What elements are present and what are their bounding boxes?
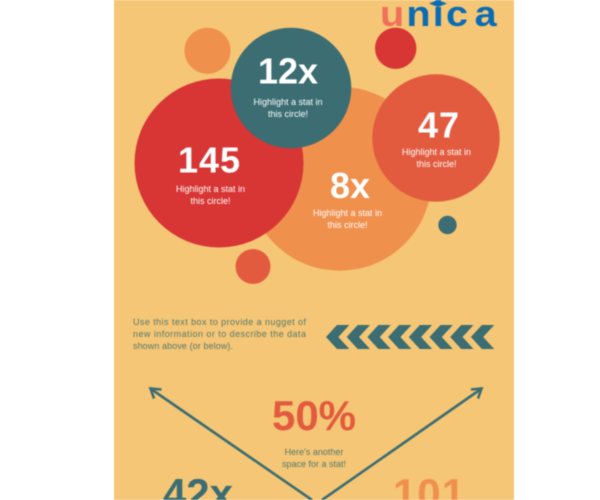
- stat circle: 12x: Highlight a stat in: [253, 97, 323, 107]
- stat circle: 8x: [248, 87, 432, 271]
- stat circle: 47: 47: [418, 104, 460, 146]
- stat circle: 8x: 8x: [330, 165, 370, 206]
- stat circle: 47: [372, 74, 500, 202]
- stat circle: 12x: 12x: [258, 50, 318, 92]
- stat circle: 8x: this circle!: [327, 220, 368, 230]
- stat circle: 12x: this circle!: [268, 109, 308, 119]
- text block: nugget of information: [133, 317, 306, 351]
- stat circle: 47: this circle!: [416, 159, 457, 169]
- arrow: up and to the right: [322, 388, 482, 500]
- stat circle: 145: this circle!: [190, 196, 231, 206]
- panel: poster background: [114, 0, 514, 500]
- arrow: up and to the left: [150, 388, 312, 500]
- decorative circle: small teal: [438, 216, 457, 234]
- decorative circle: small red: [375, 28, 416, 69]
- text block: nugget of information: Use this text box to provide a nugget of: [133, 317, 306, 327]
- decorative circle: small coral: [236, 249, 270, 284]
- stat circle: 47: Highlight a stat in: [402, 147, 471, 157]
- stat circle: 145: Highlight a stat in: [176, 184, 245, 194]
- text block: another stat space: space for a stat!: [282, 459, 346, 469]
- decorative circle: small orange: [184, 28, 230, 74]
- stat circle: 145: 145: [178, 140, 241, 180]
- stat circle: 12x: [231, 28, 351, 148]
- arrow: row of chevrons pointing left: [326, 325, 494, 349]
- stat: 50%: 50%: [272, 392, 356, 439]
- text block: nugget of information: shown above (or below).: [133, 341, 233, 351]
- text block: another stat space: [282, 447, 346, 469]
- stat circle: 145: [134, 78, 304, 248]
- text block: another stat space: Here's another: [285, 447, 343, 457]
- stat circle: 8x: Highlight a stat in: [313, 208, 382, 218]
- text block: nugget of information: new information or to describe the data: [133, 329, 306, 339]
